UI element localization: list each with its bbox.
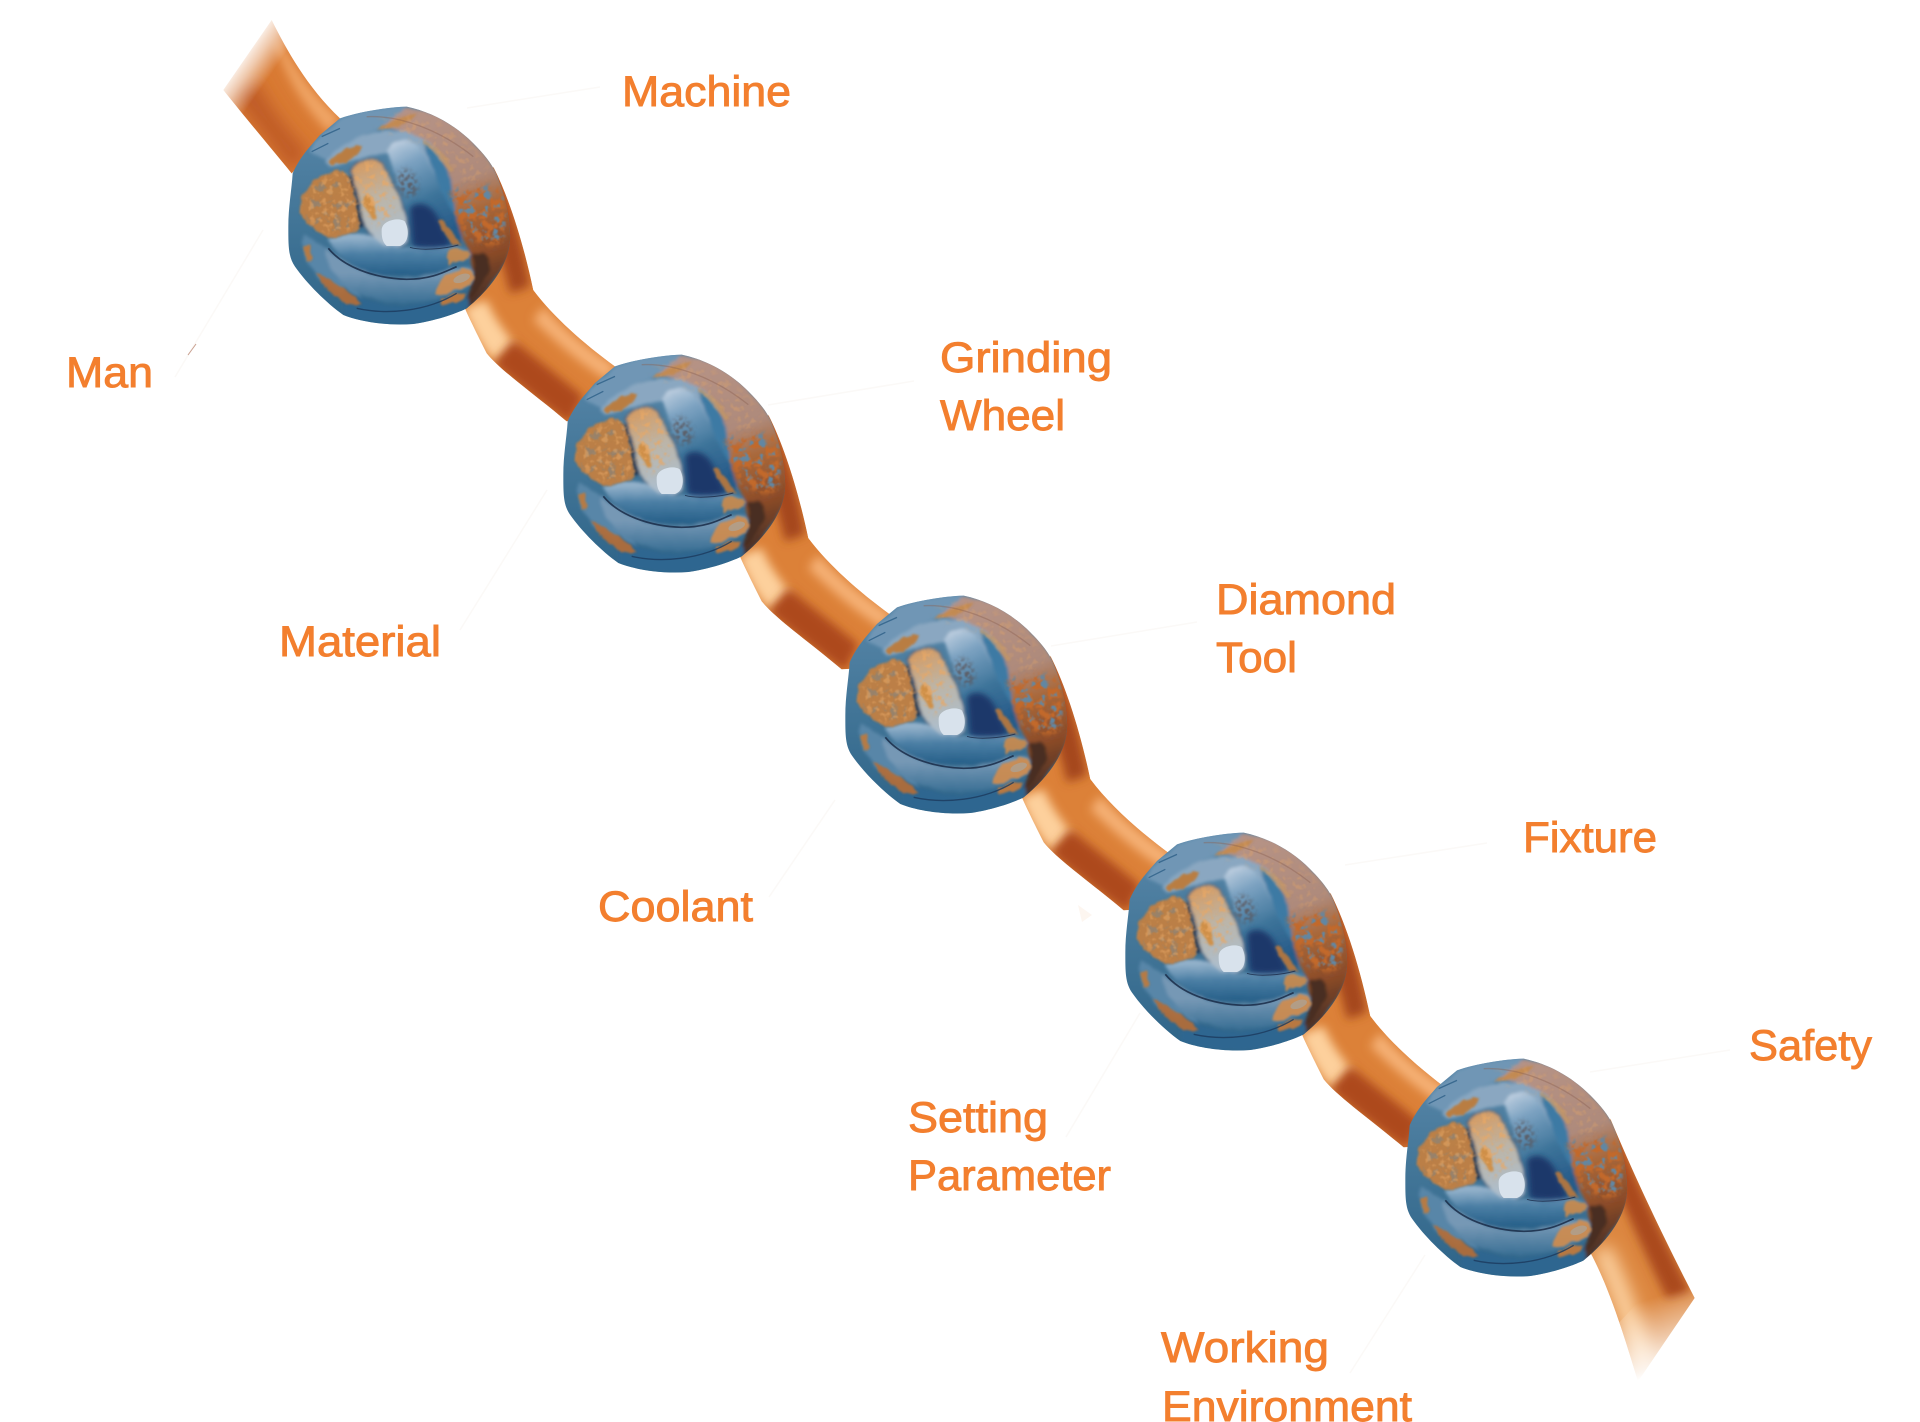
pale fleck beside arm: [1078, 905, 1092, 922]
label: Diamond Tool: Tool: [1216, 634, 1297, 682]
globe hands 4: [1124, 826, 1364, 1059]
arm: globe 4 to globe 5: [1300, 893, 1477, 1149]
label: Setting Parameter: [908, 1094, 1111, 1200]
label: Fixture: Fixture: [1523, 814, 1657, 862]
label: Material: Material: [279, 618, 441, 666]
arm: globe 2 to globe 3: [738, 415, 915, 671]
globe hands 3: [844, 589, 1084, 822]
label: Diamond Tool: [1216, 576, 1396, 682]
label: Safety: Safety: [1749, 1022, 1873, 1070]
label: Working Environment: [1161, 1324, 1412, 1422]
globe hands 5: [1404, 1052, 1644, 1285]
label: Setting Parameter: Setting: [908, 1094, 1048, 1142]
globe hands 2: [562, 348, 802, 581]
label: Grinding Wheel: Grinding: [940, 334, 1112, 382]
small tick near Man: [188, 344, 196, 355]
faint leader lines: [175, 87, 1730, 1373]
label: Machine: Machine: [622, 68, 791, 116]
label: Setting Parameter: Parameter: [908, 1152, 1111, 1200]
label: Grinding Wheel: Wheel: [940, 392, 1065, 440]
arm: last, lower right: [1591, 1118, 1695, 1377]
arm: globe 1 to globe 2: [463, 167, 640, 423]
label: Working Environment: Working: [1161, 1324, 1329, 1372]
label: Man: Man: [66, 349, 153, 397]
arm: first, upper left: [224, 20, 340, 174]
globe hands 1: [287, 100, 527, 333]
arm: globe 3 to globe 4: [1020, 656, 1197, 912]
label: Diamond Tool: Diamond: [1216, 576, 1396, 624]
label: Grinding Wheel: [940, 334, 1112, 440]
label: Coolant: Coolant: [598, 883, 753, 931]
